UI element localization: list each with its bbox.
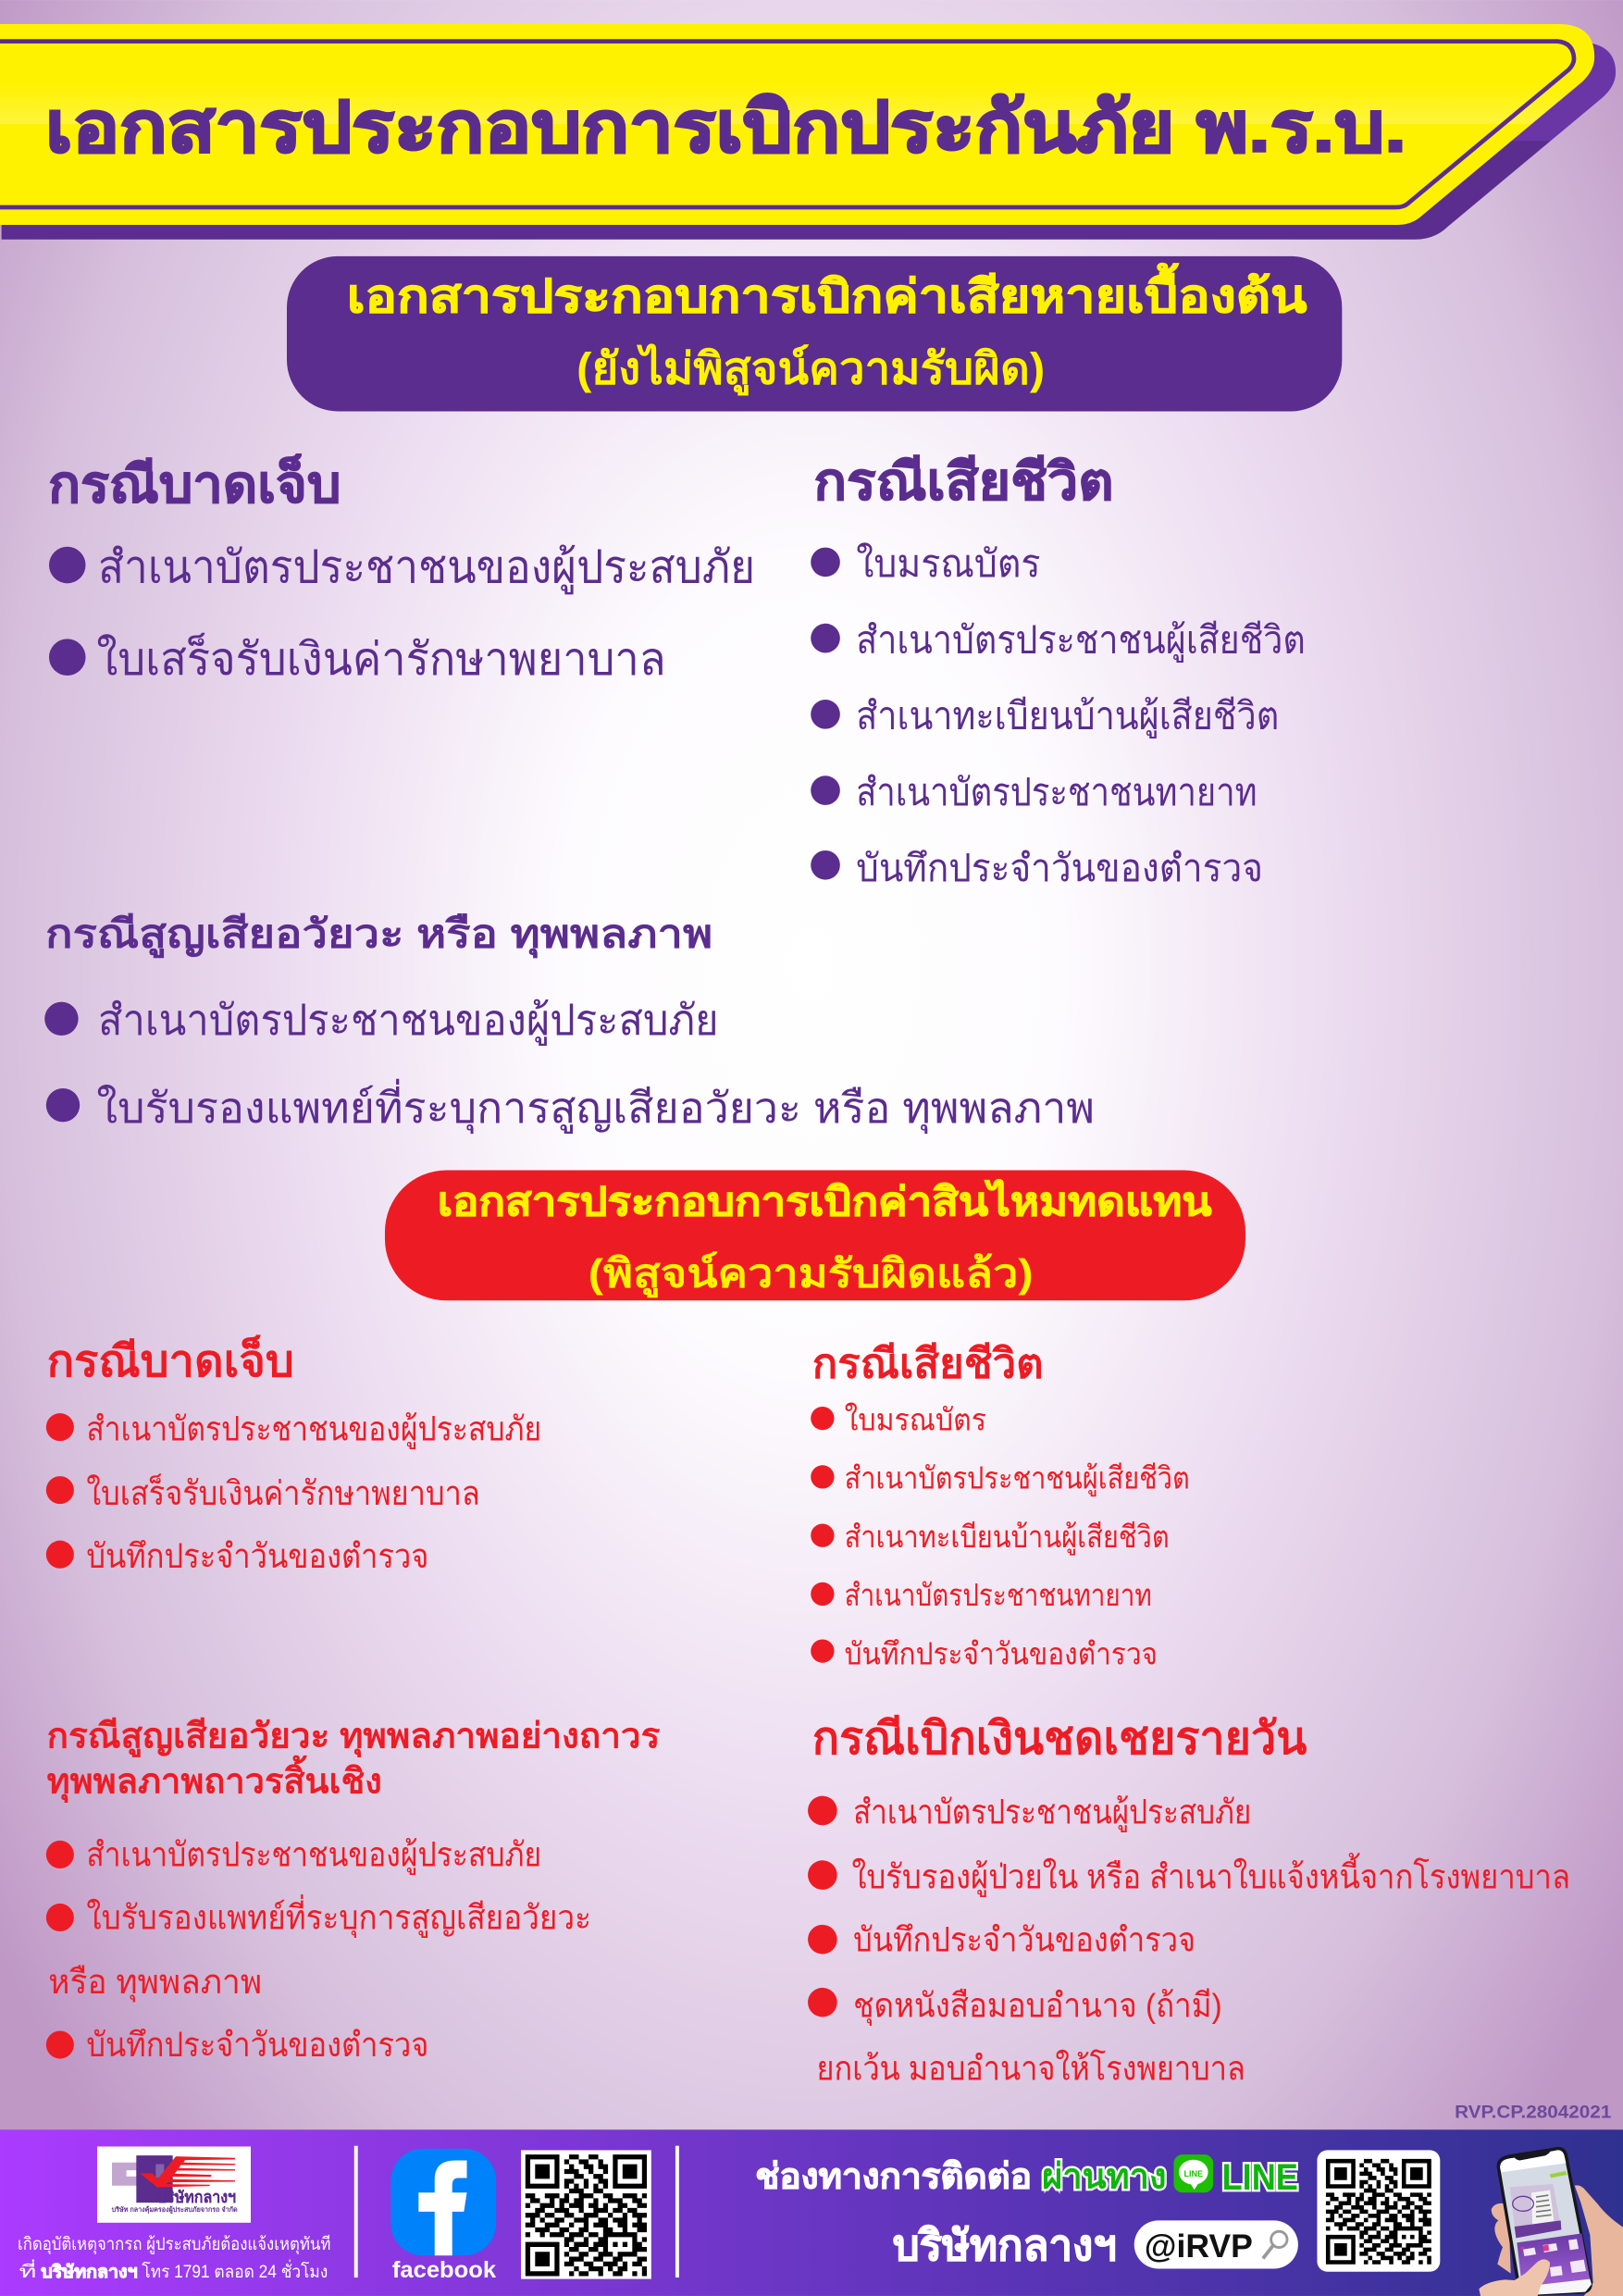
title banner <box>0 24 1616 240</box>
heading: permanent disability: กรณีสูญเสียอวัยวะ ทุพพลภาพอย่างถาวร <box>47 1717 661 1757</box>
company logo: บริษัทกลางฯ <box>157 2188 236 2206</box>
panel: preliminary injury <box>48 454 755 685</box>
item 3: บันทึกประจำวันของตำรวจ <box>86 2026 428 2064</box>
item 1: สำเนาบัตรประชาชนของผู้ประสบภัย <box>86 1409 541 1449</box>
report notice <box>18 2234 330 2282</box>
heading: daily compensation: กรณีเบิกเงินชดเชยรายวัน <box>812 1714 1307 1764</box>
panel: compensation death <box>811 1341 1190 1671</box>
panel: compensation permanent disability <box>46 1717 661 2064</box>
heading: disability: กรณีสูญเสียอวัยวะ หรือ ทุพพลภาพ <box>45 912 712 958</box>
phone in hand <box>1479 2147 1623 2296</box>
item 5: บันทึกประจำวันของตำรวจ <box>845 1637 1158 1671</box>
item 1: สำเนาบัตรประชาชนผู้ประสบภัย <box>853 1793 1251 1833</box>
contact line 1: ผ่านทาง <box>1042 2158 1167 2197</box>
banner body <box>0 24 1594 225</box>
item 2: ใบรับรองแพทย์ที่ระบุการสูญเสียอวัยวะ <box>86 1895 591 1939</box>
icon: LINE <box>1173 2154 1213 2192</box>
report notice: โทร 1791 ตลอด 24 ชั่วโมง <box>142 2259 328 2282</box>
QR code: facebook <box>521 2150 651 2279</box>
item 4: ยกเว้น มอบอำนาจให้โรงพยาบาล <box>817 2050 1245 2088</box>
item 4: สำเนาบัตรประชาชนทายาท <box>845 1579 1152 1613</box>
item 3: บันทึกประจำวันของตำรวจ <box>86 1537 428 1575</box>
search pill <box>1134 2220 1298 2269</box>
left fingers <box>1492 2203 1511 2274</box>
contact line 2: บริษัทกลางฯ <box>893 2221 1117 2269</box>
heading: injury: กรณีบาดเจ็บ <box>48 454 341 514</box>
item 2: ใบรับรองแพทย์ที่ระบุการสูญเสียอวัยวะ หรือ ทุพพลภาพ <box>96 1078 1095 1135</box>
item 1: สำเนาบัตรประชาชนของผู้ประสบภัย <box>98 543 755 595</box>
report notice: บริษัทกลางฯ <box>41 2263 138 2282</box>
company logo: บริษัท กลางคุ้มครองผู้ประสบภัยจากรถ จำกัด <box>112 2205 238 2215</box>
heading pill: preliminary damages: (ยังไม่พิสูจน์ความรับผิด) <box>576 342 1045 396</box>
footer band <box>0 2129 1623 2296</box>
icon: facebook <box>390 2149 497 2283</box>
item 4: สำเนาบัตรประชาชนทายาท <box>856 771 1258 813</box>
phone screen <box>1500 2150 1589 2293</box>
item 1: ใบมรณบัตร <box>856 541 1041 585</box>
item 1: ใบมรณบัตร <box>845 1402 986 1437</box>
title: เอกสารประกอบการเบิกประกันภัย พ.ร.บ. <box>45 89 1406 168</box>
heading pill: compensation: เอกสารประกอบการเบิกค่าสินไหมทดแทน <box>438 1178 1212 1224</box>
heading pill: preliminary damages <box>287 256 1342 411</box>
item 2: สำเนาบัตรประชาชนผู้เสียชีวิต <box>856 618 1306 663</box>
item 3: สำเนาทะเบียนบ้านผู้เสียชีวิต <box>845 1520 1170 1556</box>
thumb and lower hand <box>1479 2259 1550 2296</box>
banner inner line <box>0 42 1574 207</box>
item 2: ใบเสร็จรับเงินค่ารักษาพยาบาล <box>96 632 666 685</box>
item 2: หรือ ทุพพลภาพ <box>48 1963 262 2003</box>
heading pill: compensation: (พิสูจน์ความรับผิดแล้ว) <box>588 1250 1034 1297</box>
item 2: ใบเสร็จรับเงินค่ารักษาพยาบาล <box>86 1472 480 1512</box>
contact line 2 <box>893 2220 1298 2269</box>
item 2: สำเนาบัตรประชาชนผู้เสียชีวิต <box>845 1462 1190 1497</box>
search pill: @iRVP <box>1145 2229 1253 2265</box>
phone body <box>1497 2147 1592 2296</box>
heading pill: compensation <box>385 1171 1245 1300</box>
heading: injury: กรณีบาดเจ็บ <box>47 1334 294 1386</box>
item 1: สำเนาบัตรประชาชนของผู้ประสบภัย <box>98 996 719 1046</box>
contact line 1: LINE <box>1222 2157 1298 2198</box>
banner shadow <box>2 43 1616 240</box>
hand back <box>1575 2185 1623 2296</box>
document code: RVP.CP.28042021 <box>1455 2104 1612 2123</box>
report notice: เกิดอุบัติเหตุจากรถ ผู้ประสบภัยต้องแจ้งเหตุทันที <box>18 2234 330 2255</box>
icon: facebook: facebook <box>392 2257 497 2283</box>
item 2 <box>46 1895 591 2003</box>
heading: death: กรณีเสียชีวิต <box>813 453 1114 510</box>
company logo <box>97 2146 251 2223</box>
QR code: LINE <box>1317 2150 1440 2272</box>
report notice: ที่ <box>19 2259 37 2282</box>
icon: LINE: LINE <box>1184 2169 1203 2179</box>
panel: daily compensation <box>808 1714 1570 2088</box>
item 3: สำเนาทะเบียนบ้านผู้เสียชีวิต <box>856 695 1279 739</box>
item 5: บันทึกประจำวันของตำรวจ <box>856 847 1263 889</box>
item 4: ชุดหนังสือมอบอำนาจ (ถ้ามี) <box>853 1986 1222 2026</box>
item 1: สำเนาบัตรประชาชนของผู้ประสบภัย <box>86 1836 541 1876</box>
panel: compensation injury <box>46 1334 541 1575</box>
contact line 1 <box>755 2154 1298 2198</box>
contact line 1: ช่องทางการติดต่อ <box>755 2158 1032 2197</box>
item 3: บันทึกประจำวันของตำรวจ <box>853 1920 1196 1958</box>
item 4 <box>808 1986 1245 2088</box>
panel: preliminary death <box>811 453 1306 889</box>
heading: permanent disability: ทุพพลภาพถาวรสิ้นเชิง <box>47 1756 382 1804</box>
heading pill: preliminary damages: เอกสารประกอบการเบิกค่าเสียหายเบื้องต้น <box>347 263 1307 322</box>
panel: preliminary disability <box>44 912 1095 1135</box>
heading: permanent disability <box>47 1717 661 1804</box>
heading: death: กรณีเสียชีวิต <box>812 1341 1044 1386</box>
